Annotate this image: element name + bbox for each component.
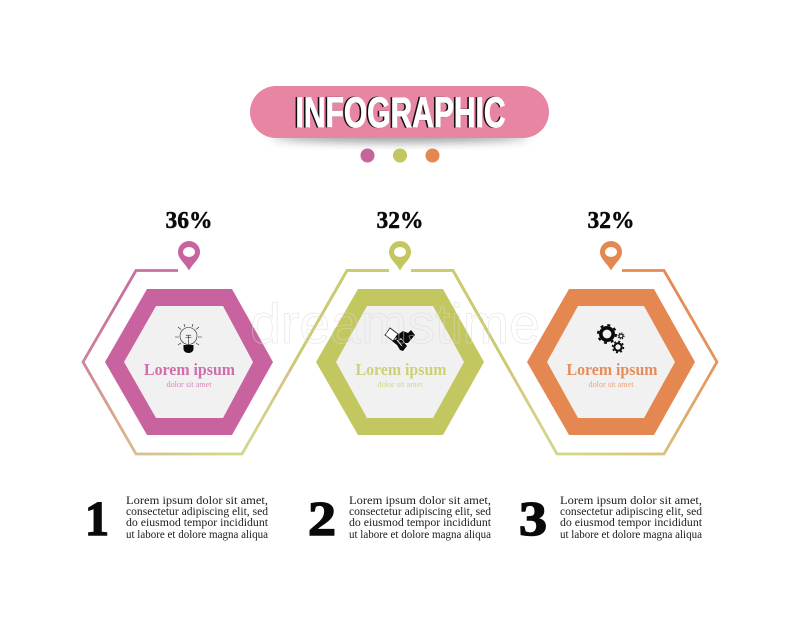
description 1: Lorem ipsum dolor sit amet, <box>126 493 268 507</box>
description 2: ut labore et dolore magna aliqua <box>349 527 492 541</box>
title banner: INFOGRAPHIC <box>294 89 504 137</box>
sublabel: dolor sit amet <box>588 380 634 389</box>
label: Lorem ipsum <box>144 360 235 379</box>
outer hexagon orange <box>527 289 695 435</box>
title banner: INFOGRAPHIC <box>296 89 506 137</box>
icon: light bulb <box>175 324 202 353</box>
icon: map pin orange <box>600 241 622 270</box>
panel: step 2 hexagon <box>316 208 484 435</box>
percentage 32%: 32% <box>376 208 424 234</box>
icon: handshake <box>385 328 415 351</box>
description 1: ut labore et dolore magna aliqua <box>126 527 269 541</box>
text block 2 <box>308 491 492 546</box>
green outline overlay <box>290 270 389 370</box>
icon: gears <box>598 325 624 352</box>
label: Lorem ipsum <box>356 360 447 379</box>
description 3: do eiusmod tempor incididunt <box>560 515 703 529</box>
green outline overlay right <box>411 270 510 371</box>
label: Lorem ipsum <box>566 360 658 379</box>
sublabel: dolor sit amet <box>166 380 212 389</box>
description 1: do eiusmod tempor incididunt <box>126 515 269 529</box>
title banner <box>250 86 549 142</box>
inner hexagon <box>124 306 253 418</box>
panel: step 1 hexagon <box>105 208 273 435</box>
description 3: consectetur adipiscing elit, sed <box>560 504 702 518</box>
inner hexagon <box>547 306 675 418</box>
description 2: Lorem ipsum dolor sit amet, <box>349 493 491 507</box>
description 2: consectetur adipiscing elit, sed <box>349 504 491 518</box>
outer hexagon pink <box>105 289 273 435</box>
description 3: ut labore et dolore magna aliqua <box>560 527 703 541</box>
sublabel: dolor sit amet <box>378 380 423 389</box>
panel: step 3 hexagon <box>527 208 695 435</box>
number 2: 2 <box>308 491 336 546</box>
number 1: 1 <box>85 491 109 546</box>
icon: map pin green <box>389 241 411 270</box>
connecting outline: left hexagon <box>83 270 389 454</box>
text block 3 <box>519 491 703 546</box>
decorative colour dots <box>360 148 440 162</box>
watermark: dreamstime <box>250 292 540 355</box>
description 3: Lorem ipsum dolor sit amet, <box>560 493 702 507</box>
description 2: do eiusmod tempor incididunt <box>349 515 492 529</box>
number 3: 3 <box>519 491 547 546</box>
percentage 32%: 32% <box>588 208 634 234</box>
description 1: consectetur adipiscing elit, sed <box>126 504 268 518</box>
percentage 36%: 36% <box>166 208 212 234</box>
outer hexagon green <box>316 289 484 435</box>
text block 1 <box>85 491 269 546</box>
inner hexagon <box>336 306 464 418</box>
icon: map pin pink <box>178 241 200 270</box>
connecting outline: right hexagon <box>411 270 717 454</box>
